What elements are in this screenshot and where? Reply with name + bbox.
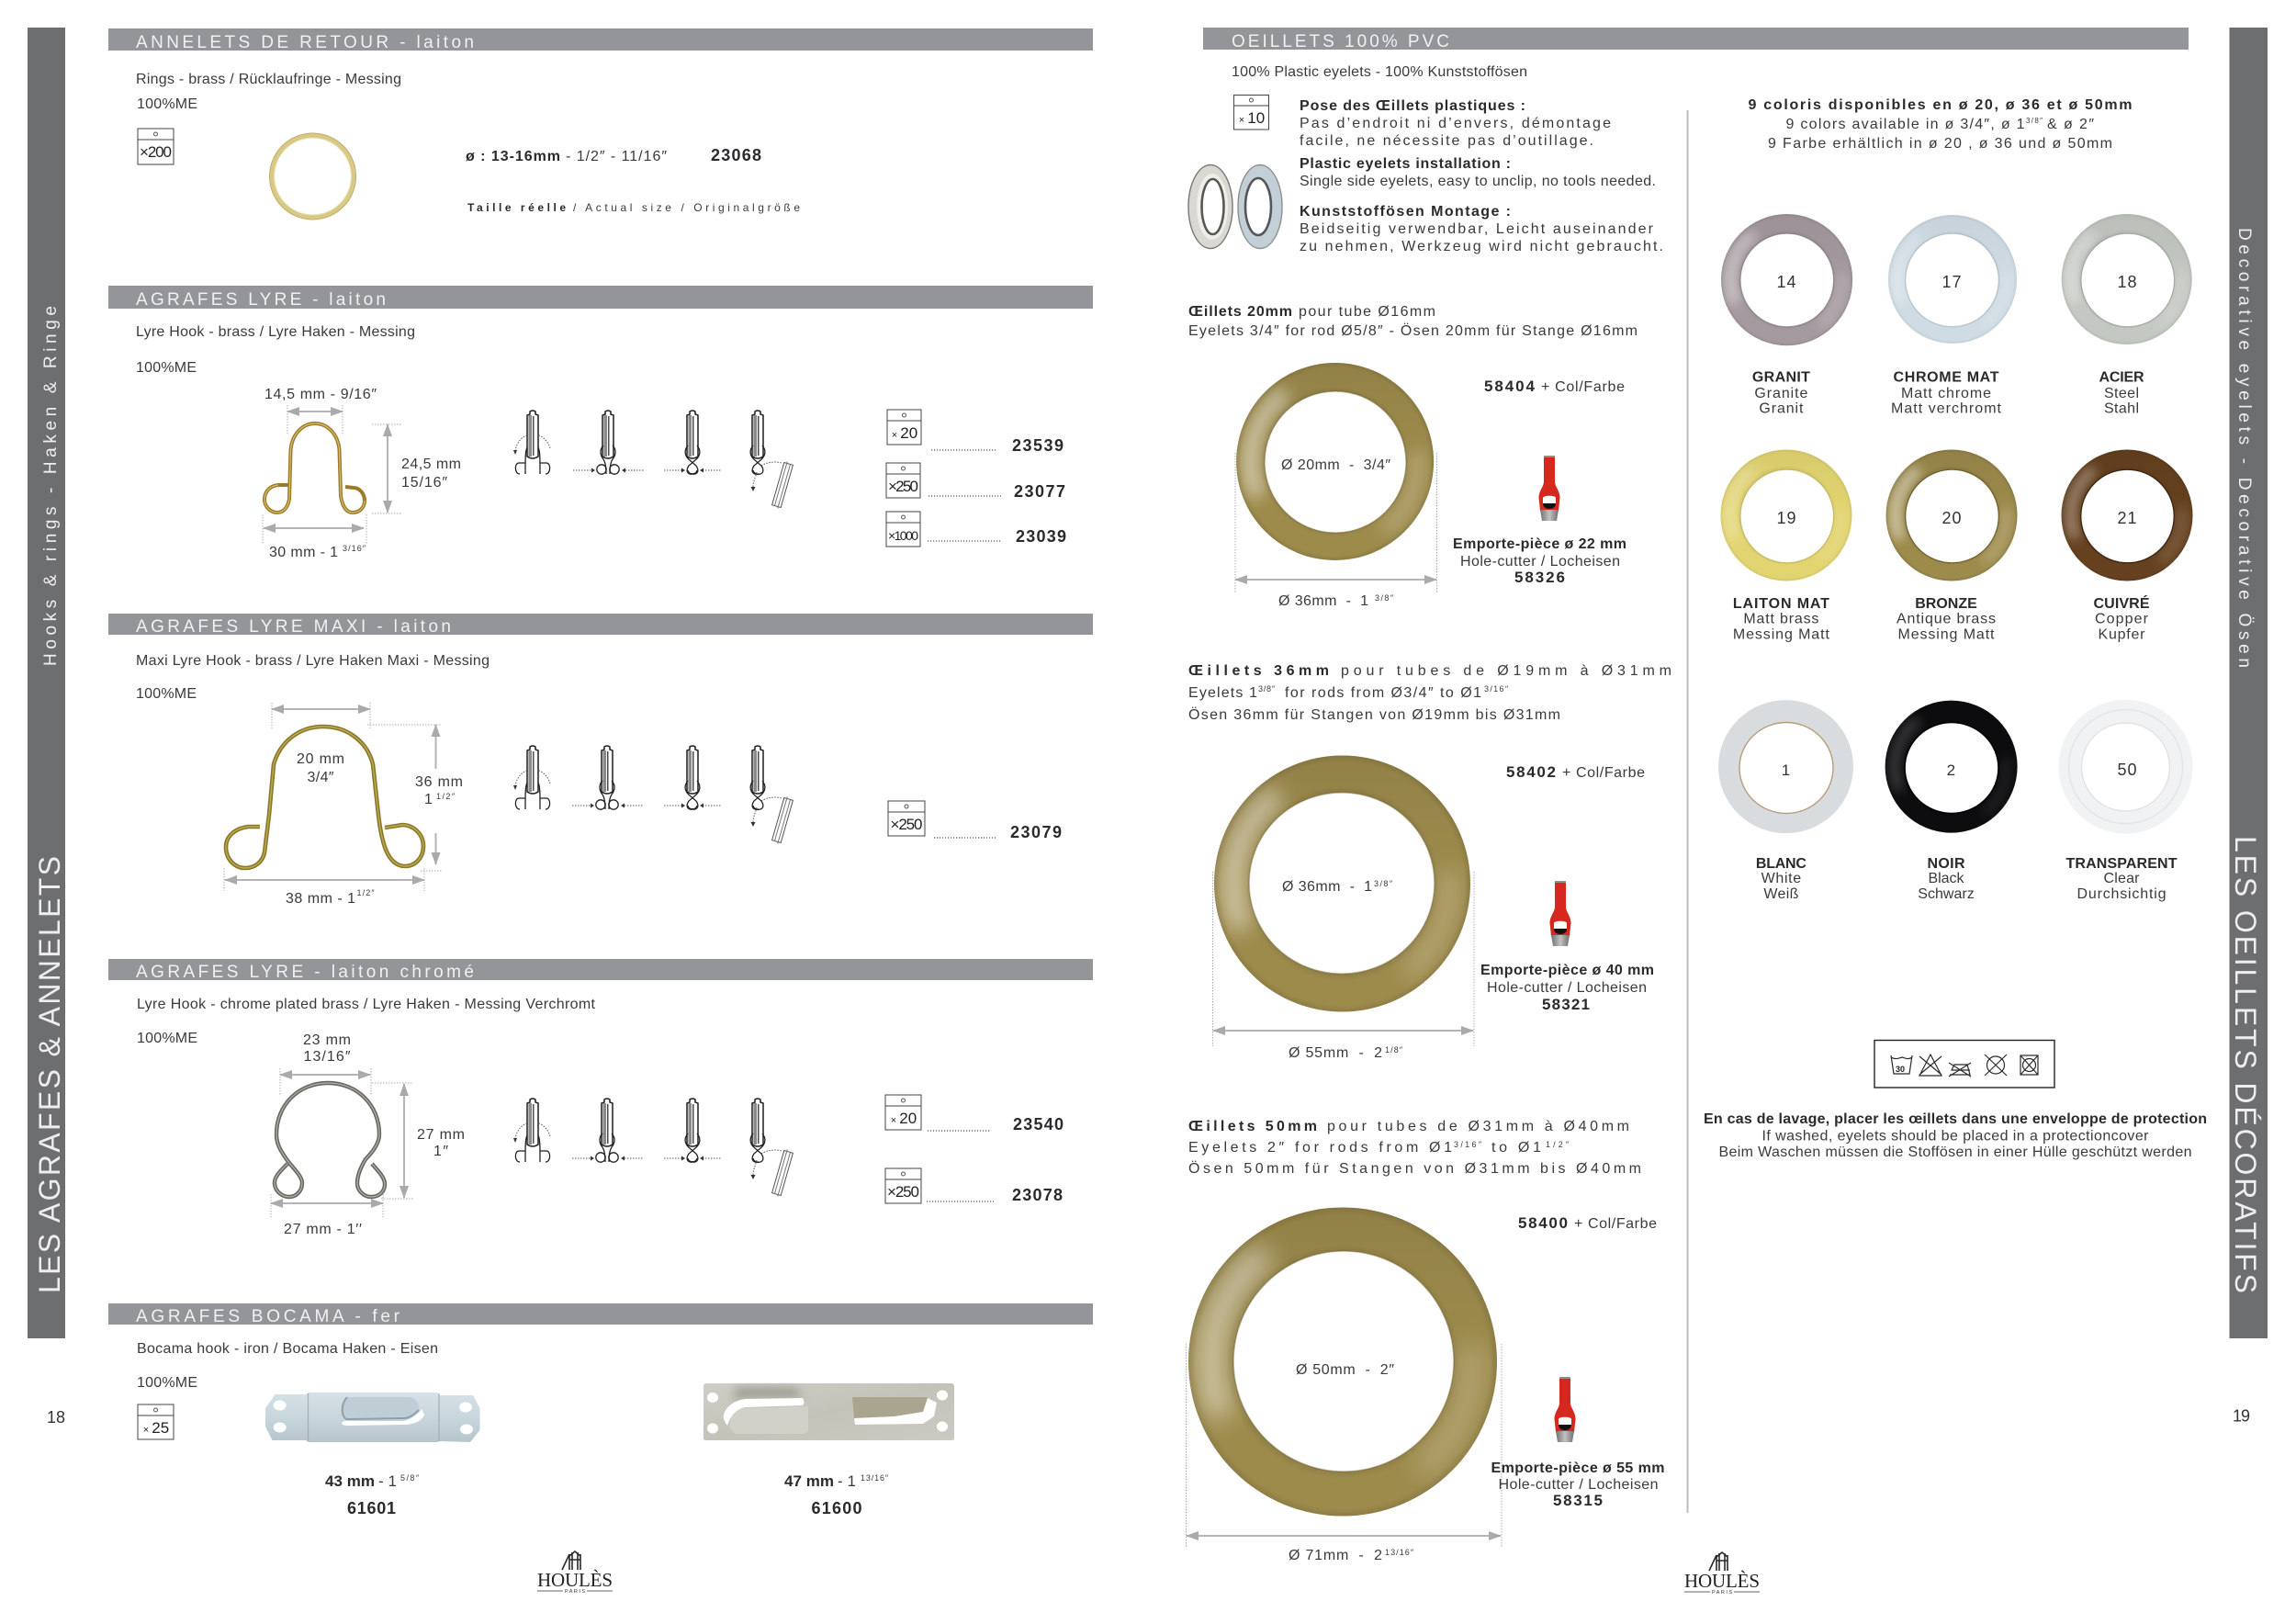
pack icon x10: × 10 xyxy=(1239,109,1265,127)
heading text xyxy=(1188,663,1671,723)
heading bar xyxy=(108,28,1093,52)
swatch 1 blanc: White xyxy=(1761,871,1801,886)
installation steps xyxy=(513,746,793,844)
product code 58402 xyxy=(1506,763,1645,781)
heading bar: OEILLETS 100% PVC xyxy=(1232,32,1449,51)
product code 58404 xyxy=(1484,378,1625,395)
hole cutter label: 58321 xyxy=(1542,996,1590,1013)
diagram: chrome lyre hook with dimensions: 27 mm - 1′′ xyxy=(284,1222,362,1237)
heading bar xyxy=(108,959,1093,982)
panel: oeillets 100% pvc header xyxy=(1188,28,2189,254)
swatch 20 bronze xyxy=(1886,450,2017,643)
diagram: chrome lyre hook with dimensions: 13/16″ xyxy=(303,1049,351,1065)
installation text: Pose des Œillets plastiques : xyxy=(1300,98,1525,114)
swatch 17 chrome mat: Matt chrome xyxy=(1901,386,1991,401)
swatch 18 acier xyxy=(2062,214,2192,417)
hole cutter label xyxy=(1453,536,1626,586)
swatch 2 noir: Schwarz xyxy=(1918,886,1975,902)
diagram: chrome lyre hook with dimensions xyxy=(271,1032,465,1237)
hole cutter label: 58326 xyxy=(1514,569,1565,586)
description: Rings - brass / Rücklaufringe - Messing xyxy=(136,72,401,87)
diagram: lyre hook with dimensions: 15/16″ xyxy=(401,475,447,491)
product code 23068: 23068 xyxy=(711,146,761,164)
material note: 100%ME xyxy=(137,96,197,112)
hole cutter label: Hole-cutter / Locheisen xyxy=(1499,1477,1659,1493)
size label: ø : 13-16mm xyxy=(466,149,560,164)
installation steps xyxy=(513,411,793,509)
heading text: 3/16″ xyxy=(1454,1140,1482,1149)
swatch 2 noir: Black xyxy=(1929,871,1965,886)
pack and code 23039 xyxy=(886,512,1066,547)
icon: no bleach xyxy=(1919,1054,1941,1076)
swatch 50 transparent: Clear xyxy=(2103,871,2140,886)
label 61601: 61601 xyxy=(347,1499,396,1517)
ring 50mm with dimension xyxy=(1187,1207,1502,1563)
swatch 1 blanc: 1 xyxy=(1782,761,1790,779)
icon: no tumble iron xyxy=(1949,1063,1971,1077)
label 61601 xyxy=(325,1472,420,1517)
description: Lyre Hook - chrome plated brass / Lyre Haken - Messing Verchromt xyxy=(137,997,596,1012)
material note: 100%ME xyxy=(136,686,197,702)
panel: agrafes bocama xyxy=(108,1303,1093,1595)
swatch 21 cuivre: 21 xyxy=(2118,509,2136,527)
pack and code 23078: ×250 xyxy=(887,1183,919,1201)
installation text: Pas d’endroit ni d’envers, démontage xyxy=(1300,116,1611,131)
swatch 2 noir: NOIR xyxy=(1927,856,1965,872)
material note: 100%ME xyxy=(136,360,197,376)
swatch 14 granit: Granite xyxy=(1754,386,1807,401)
pack and code 23079: 23079 xyxy=(1010,823,1062,841)
colours heading: & ø 2″ xyxy=(2047,117,2094,132)
size label xyxy=(466,149,667,164)
heading text: to Ø1 xyxy=(1491,1140,1541,1156)
washing note xyxy=(1704,1111,2207,1160)
icon: hole cutter xyxy=(1550,881,1570,946)
icon: hole cutter xyxy=(1554,1377,1576,1442)
colours heading: 9 Farbe erhältlich in ø 20 , ø 36 und ø 50mm xyxy=(1768,136,2112,152)
pack and code 23078 xyxy=(885,1168,1063,1204)
pack and code 23540 xyxy=(885,1095,1064,1133)
label 61600: - 1 xyxy=(838,1472,856,1490)
hole cutter label: Emporte-pièce ø 22 mm xyxy=(1453,536,1626,552)
label 61600: 13/16″ xyxy=(861,1473,889,1483)
pack and code 23039: 23039 xyxy=(1016,527,1066,546)
swatch 50 transparent: Durchsichtig xyxy=(2077,886,2166,902)
diagram: lyre hook with dimensions: 14,5 mm - 9/16″ xyxy=(264,387,377,402)
diagram: maxi lyre hook with dimensions xyxy=(224,703,463,907)
panel: agrafes lyre laiton xyxy=(108,286,1093,560)
product code 58402: 58402 xyxy=(1506,763,1556,781)
swatch 50 transparent: TRANSPARENT xyxy=(2066,856,2178,872)
hole cutter label: Emporte-pièce ø 55 mm xyxy=(1491,1460,1664,1476)
ring 20mm with dimension xyxy=(1235,363,1436,609)
heading text: 3/8″ xyxy=(1258,684,1276,694)
diagram: chrome lyre hook with dimensions: 23 mm xyxy=(303,1032,351,1048)
hole cutter label: Emporte-pièce ø 40 mm xyxy=(1480,963,1654,978)
description: 100% Plastic eyelets - 100% Kunststoffösen xyxy=(1232,64,1527,80)
label 61601: 5/8″ xyxy=(400,1473,420,1483)
ring 20mm with dimension: 3/8″ xyxy=(1375,593,1394,603)
installation text: Kunststoffösen Montage : xyxy=(1300,204,1511,220)
heading bar xyxy=(108,614,1093,637)
diagram: lyre hook with dimensions: 24,5 mm xyxy=(401,457,461,472)
pack and code 23077: ×250 xyxy=(888,478,918,495)
heading text: Ösen 36mm für Stangen von Ø19mm bis Ø31mm xyxy=(1188,706,1560,723)
swatch 19 laiton mat: Matt brass xyxy=(1743,612,1818,627)
swatch 1 blanc xyxy=(1718,700,1853,902)
heading text: 1/2″ xyxy=(1546,1140,1570,1149)
swatch 14 granit: 14 xyxy=(1776,273,1796,291)
icon: hole cutter xyxy=(1539,456,1559,521)
panel: annelets de retour xyxy=(108,28,1093,220)
swatch 17 chrome mat: Matt verchromt xyxy=(1891,400,2002,417)
swatch 50 transparent xyxy=(2059,700,2193,902)
actual size note xyxy=(467,201,800,214)
hole cutter label: 58315 xyxy=(1553,1492,1603,1509)
pack and code 23077: 23077 xyxy=(1014,482,1065,501)
ring 36mm with dimension xyxy=(1212,755,1474,1061)
description: Bocama hook - iron / Bocama Haken - Eisen xyxy=(137,1341,438,1357)
diagram: chrome lyre hook with dimensions: 1″ xyxy=(433,1144,448,1159)
sidebar title: LES OEILLETS DÉCORATIFS xyxy=(2229,836,2262,1293)
heading bar: AGRAFES LYRE - laiton xyxy=(136,290,386,310)
panel: colours xyxy=(1704,97,2207,1160)
hole cutter label: Hole-cutter / Locheisen xyxy=(1487,980,1647,996)
label 61600: 47 mm xyxy=(784,1472,834,1490)
installation text xyxy=(1300,98,1663,254)
diagram: chrome lyre hook with dimensions: 27 mm xyxy=(417,1127,465,1143)
washing note: Beim Waschen müssen die Stoffösen in einer Hülle geschützt werden xyxy=(1719,1145,2191,1160)
installation text: Beidseitig verwendbar, Leicht auseinander xyxy=(1300,221,1654,237)
pack icon x25 xyxy=(138,1404,174,1439)
page number 19: 19 xyxy=(2233,1407,2250,1426)
swatch 21 cuivre: CUIVRÉ xyxy=(2094,594,2150,612)
label 61600 xyxy=(784,1472,889,1517)
icon: bocama plate 61601 xyxy=(265,1393,479,1442)
ring 50mm with dimension: 13/16″ xyxy=(1385,1548,1414,1557)
washing note: If washed, eyelets should be placed in a protectioncover xyxy=(1761,1128,2149,1145)
diagram: maxi lyre hook with dimensions: 1 xyxy=(424,792,433,807)
description: Lyre Hook - brass / Lyre Haken - Messing xyxy=(136,324,415,340)
diagram: maxi lyre hook with dimensions: 3/4″ xyxy=(307,770,334,785)
swatch 20 bronze: BRONZE xyxy=(1915,596,1977,612)
pack and code 23540: 23540 xyxy=(1013,1115,1064,1133)
panel: oeillets 36mm xyxy=(1188,663,1671,1061)
pack icon x10 xyxy=(1234,96,1269,130)
icon: brass ring xyxy=(270,133,356,220)
sidebar subtitle: Decorative eyelets - Decorative Ösen xyxy=(2234,228,2254,668)
heading bar: AGRAFES LYRE MAXI - laiton xyxy=(136,617,451,637)
swatch 20 bronze: 20 xyxy=(1941,509,1962,527)
heading text: Œillets 36mm xyxy=(1188,663,1329,679)
label 61601: 43 mm xyxy=(325,1472,375,1490)
swatch 18 acier: Stahl xyxy=(2104,400,2139,417)
swatch 20 bronze: Messing Matt xyxy=(1897,627,1995,643)
diagram: lyre hook with dimensions: 30 mm - 1 xyxy=(269,545,338,560)
heading bar xyxy=(1203,28,2189,51)
label 61600: 61600 xyxy=(812,1499,861,1517)
installation text: facile, ne nécessite pas d’outillage. xyxy=(1300,133,1593,149)
swatch 17 chrome mat xyxy=(1888,215,2017,417)
heading text: Ösen 50mm für Stangen von Ø31mm bis Ø40mm xyxy=(1188,1160,1641,1177)
right sidebar: decorative eyelets xyxy=(2229,28,2268,1338)
heading bar xyxy=(108,1303,1093,1326)
ring 50mm with dimension: Ø 71mm - 2 xyxy=(1289,1548,1382,1563)
swatch 14 granit xyxy=(1721,214,1852,417)
heading text: pour tube Ø16mm xyxy=(1299,304,1435,320)
panel: oeillets 20mm xyxy=(1188,304,1638,609)
installation text: zu nehmen, Werkzeug wird nicht gebraucht. xyxy=(1300,239,1663,254)
logo xyxy=(1684,1552,1760,1596)
heading text: Eyelets 3/4″ for rod Ø5/8″ - Ösen 20mm für Stange Ø16mm xyxy=(1188,322,1638,339)
colours heading: 9 coloris disponibles en ø 20, ø 36 et ø 50mm xyxy=(1749,97,2133,113)
product code 58400: 58400 xyxy=(1518,1214,1568,1232)
swatch 2 noir xyxy=(1885,701,2018,902)
product code 58402: + Col/Farbe xyxy=(1562,765,1645,781)
heading text: Œillets 50mm xyxy=(1188,1119,1317,1134)
column divider xyxy=(1686,110,1688,1513)
swatch 17 chrome mat: 17 xyxy=(1941,273,1962,291)
label 61601: - 1 xyxy=(378,1472,397,1490)
pack and code 23079: ×250 xyxy=(891,816,922,833)
swatch 14 granit: GRANIT xyxy=(1752,369,1810,386)
pack and code 23078: 23078 xyxy=(1012,1186,1063,1204)
heading text: 3/16″ xyxy=(1484,684,1509,694)
sidebar subtitle: hooks rings: Hooks & rings - Haken & Ringe xyxy=(41,306,61,666)
heading text: Œillets 20mm xyxy=(1188,304,1292,320)
icon: bocama plate 61600 xyxy=(703,1383,954,1440)
care symbols box xyxy=(1874,1040,2054,1088)
material note: 100%ME xyxy=(137,1375,197,1391)
swatch 19 laiton mat: LAITON MAT xyxy=(1733,596,1829,612)
heading bar: AGRAFES LYRE - laiton chromé xyxy=(136,963,474,982)
icon: wash 30: 30 xyxy=(1896,1065,1905,1074)
heading text: Eyelets 2″ for rods from Ø1 xyxy=(1188,1140,1452,1156)
swatch 1 blanc: Weiß xyxy=(1763,886,1799,902)
ring 36mm with dimension: 3/8″ xyxy=(1374,879,1393,888)
hole cutter label xyxy=(1480,963,1654,1013)
heading bar: AGRAFES BOCAMA - fer xyxy=(136,1307,400,1326)
heading text: for rods from Ø3/4″ to Ø1 xyxy=(1285,685,1481,701)
swatch 19 laiton mat xyxy=(1721,450,1851,643)
panel: oeillets 50mm xyxy=(1187,1119,1664,1563)
panel: agrafes lyre chrome xyxy=(108,959,1093,1237)
swatch 14 granit: Granit xyxy=(1759,400,1804,417)
diagram: maxi lyre hook with dimensions: 1/2″ xyxy=(356,888,375,897)
swatch 21 cuivre: Kupfer xyxy=(2098,627,2145,643)
swatch 21 cuivre: Copper xyxy=(2095,612,2149,627)
installation text: Plastic eyelets installation : xyxy=(1300,156,1511,172)
diagram: maxi lyre hook with dimensions: 20 mm xyxy=(297,751,344,767)
description: Maxi Lyre Hook - brass / Lyre Haken Maxi - Messing xyxy=(136,653,490,669)
swatch 1 blanc: BLANC xyxy=(1756,856,1806,872)
pack and code 23539: 23539 xyxy=(1012,436,1064,455)
washing note: En cas de lavage, placer les œillets dans une enveloppe de protection xyxy=(1704,1111,2207,1127)
heading text xyxy=(1188,304,1638,339)
diagram: lyre hook with dimensions xyxy=(263,387,461,560)
ring 36mm with dimension: 1/8″ xyxy=(1385,1045,1403,1054)
ring 36mm with dimension: Ø 36mm - 1 xyxy=(1282,879,1372,895)
product code 58404: 58404 xyxy=(1484,378,1536,395)
diagram: lyre hook with dimensions: 3/16″ xyxy=(343,544,366,553)
pack icon x25: × 25 xyxy=(143,1419,169,1437)
swatch 18 acier: ACIER xyxy=(2099,369,2144,386)
actual size note: Taille réelle xyxy=(467,201,566,214)
pack and code 23079 xyxy=(888,801,1062,841)
swatch 19 laiton mat: Messing Matt xyxy=(1733,627,1829,643)
ring 20mm with dimension: Ø 20mm - 3/4″ xyxy=(1281,457,1390,473)
icon: no tumble dry xyxy=(2020,1055,2038,1075)
colours heading: 9 colors available in ø 3/4″, ø 1 xyxy=(1785,117,2025,132)
pack and code 23540: × 20 xyxy=(891,1110,917,1127)
ring 50mm with dimension: Ø 50mm - 2″ xyxy=(1296,1362,1394,1378)
icon: no dry clean xyxy=(1985,1054,2007,1076)
diagram: maxi lyre hook with dimensions: 1/2″ xyxy=(436,792,456,801)
installation text: Single side eyelets, easy to unclip, no tools needed. xyxy=(1300,174,1656,189)
diagram: maxi lyre hook with dimensions: 36 mm xyxy=(415,774,463,790)
sidebar title: les agrafes et annelets: LES AGRAFES & ANNELETS xyxy=(33,856,66,1293)
product code 58400: + Col/Farbe xyxy=(1574,1216,1657,1232)
icon: two plastic eyelets xyxy=(1188,165,1282,248)
product code 58400 xyxy=(1518,1214,1657,1232)
heading text: Eyelets 1 xyxy=(1188,685,1257,701)
heading text: pour tubes de Ø19mm à Ø31mm xyxy=(1341,663,1671,679)
swatch 19 laiton mat: 19 xyxy=(1776,509,1796,527)
swatch 21 cuivre xyxy=(2061,450,2193,643)
swatch 20 bronze: Antique brass xyxy=(1896,612,1996,627)
heading bar xyxy=(108,286,1093,310)
icon: wash 30 xyxy=(1891,1055,1912,1074)
installation steps xyxy=(513,1099,793,1197)
swatch 50 transparent: 50 xyxy=(2118,761,2136,779)
swatch 18 acier: Steel xyxy=(2104,386,2139,401)
hole cutter label: Hole-cutter / Locheisen xyxy=(1460,554,1620,570)
heading bar: ANNELETS DE RETOUR - laiton xyxy=(136,33,474,52)
material note: 100%ME xyxy=(137,1031,197,1046)
swatch 2 noir: 2 xyxy=(1947,761,1955,779)
hole cutter label xyxy=(1491,1460,1664,1509)
colours heading: 3/8″ xyxy=(2026,117,2043,125)
pack and code 23039: ×1000 xyxy=(888,528,918,543)
left sidebar: hooks and rings xyxy=(28,28,66,1338)
ring 36mm with dimension: Ø 55mm - 2 xyxy=(1289,1045,1382,1061)
size label: - 1/2″ - 11/16″ xyxy=(566,149,667,164)
actual size note: / Actual size / Originalgröße xyxy=(573,201,800,214)
swatch 18 acier: 18 xyxy=(2118,273,2136,291)
pack and code 23539 xyxy=(887,410,1064,455)
page number 18: 18 xyxy=(47,1408,65,1427)
heading text xyxy=(1188,1119,1641,1177)
ring 20mm with dimension: Ø 36mm - 1 xyxy=(1278,593,1368,609)
pack icon x200: ×200 xyxy=(140,143,172,161)
swatch 17 chrome mat: CHROME MAT xyxy=(1894,369,1999,386)
heading text: pour tubes de Ø31mm à Ø40mm xyxy=(1327,1119,1629,1134)
pack icon x200 xyxy=(138,129,174,164)
panel: agrafes lyre maxi xyxy=(108,614,1093,907)
diagram: maxi lyre hook with dimensions: 38 mm - 1 xyxy=(286,891,355,907)
pack and code 23539: × 20 xyxy=(892,424,917,442)
colours heading xyxy=(1749,97,2133,152)
product code 58404: + Col/Farbe xyxy=(1541,379,1625,395)
pack and code 23077 xyxy=(886,463,1065,501)
logo xyxy=(537,1551,613,1595)
